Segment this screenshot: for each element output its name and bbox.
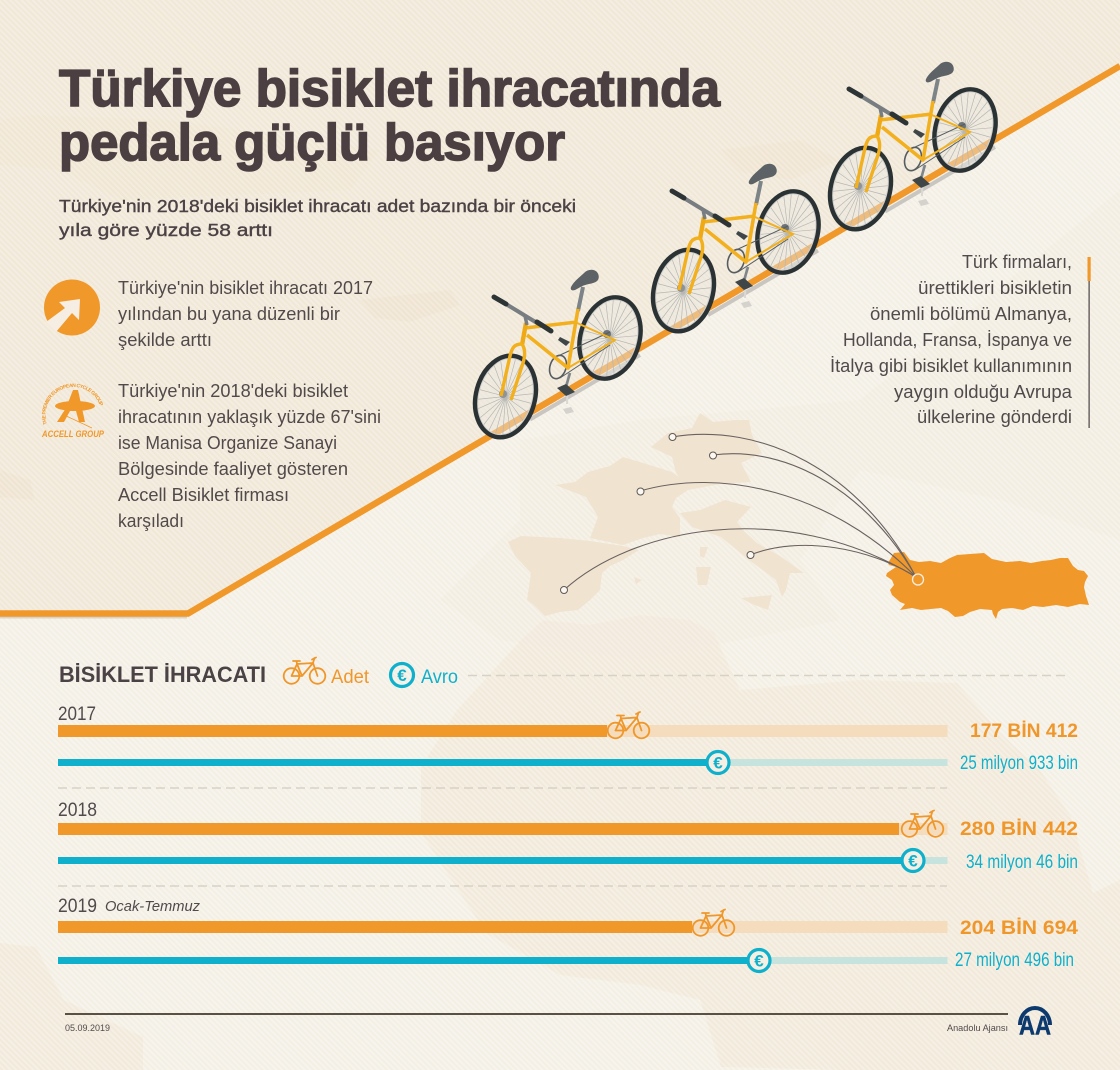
map: origin dot on Turkey <box>912 574 924 585</box>
subtitle: yıla göre yüzde 58 arttı <box>59 220 273 240</box>
legend: euro: € <box>397 666 407 685</box>
map: export arcs from Turkey <box>564 434 916 590</box>
map: Turkey <box>886 552 1089 619</box>
row: 2019: € <box>754 952 764 970</box>
row: 2017: 25 milyon 933 bin <box>960 753 1078 774</box>
text block: destination countries: yaygın olduğu Avrupa <box>894 382 1073 402</box>
footer date: 05.09.2019 <box>65 1023 110 1033</box>
row: 2018: € <box>908 852 918 870</box>
text block: export growth: şekilde arttı <box>118 330 212 350</box>
text block: destination countries <box>830 252 1073 427</box>
title: pedala güçlü basıyor <box>59 114 565 172</box>
legend: euro: Avro <box>421 667 458 688</box>
row: 2019: 204 BİN 694 <box>960 918 1078 939</box>
text block: Accell share: ihracatının yaklaşık yüzde 67'sini <box>118 407 381 427</box>
footer rule <box>65 1013 1008 1015</box>
footer source: Anadolu Ajansı <box>947 1023 1008 1034</box>
subtitle <box>59 196 576 240</box>
text block: destination countries: önemli bölümü Almanya, <box>870 304 1072 324</box>
row: 2018: 34 milyon 46 bin <box>966 852 1078 873</box>
bicycle 2 <box>644 164 828 339</box>
row: 2019: 2019 <box>58 896 97 917</box>
text block: export growth: yılından bu yana düzenli bir <box>118 304 340 324</box>
callout rule <box>1088 257 1091 428</box>
text block: Accell share <box>118 381 381 531</box>
text block: Accell share: Türkiye'nin 2018'deki bisiklet <box>118 381 348 401</box>
row: 2017: € <box>713 754 723 772</box>
bicycle 1 <box>466 270 650 445</box>
text block: destination countries: İtalya gibi bisiklet kullanımının <box>830 356 1072 376</box>
row: 2018: 280 BİN 442 <box>960 819 1078 840</box>
subtitle: Türkiye'nin 2018'deki bisiklet ihracatı adet bazında bir önceki <box>59 196 576 216</box>
text block: destination countries: Türk firmaları, <box>962 252 1072 272</box>
icon: Accell Group logo: ACCELL GROUP <box>41 429 105 440</box>
text block: Accell share: Accell Bisiklet firması <box>118 485 289 505</box>
map: Europe countries <box>508 413 804 616</box>
text block: destination countries: ülkelerine gönderdi <box>917 407 1072 427</box>
icon: upward arrow <box>44 280 100 336</box>
text block: Accell share: Bölgesinde faaliyet gösteren <box>118 459 348 479</box>
text block: destination countries: Hollanda, Fransa, İspanya ve <box>843 330 1072 350</box>
bicycle 3 <box>821 62 1005 237</box>
dashed dividers <box>58 676 1066 886</box>
row: 2017: 177 BİN 412 <box>970 721 1078 742</box>
title <box>59 60 721 172</box>
logo: Anadolu Agency: AA <box>1019 1010 1051 1040</box>
row: 2019: 27 milyon 496 bin <box>955 950 1074 971</box>
text block: Accell share: ise Manisa Organize Sanayi <box>118 433 337 453</box>
legend: bike units: Adet <box>331 667 370 688</box>
row: 2018 <box>58 800 1078 873</box>
legend: bike units <box>284 658 370 688</box>
text block: export growth: Türkiye'nin bisiklet ihracatı 2017 <box>118 278 373 298</box>
text block: destination countries: ürettikleri bisikletin <box>918 278 1072 298</box>
row: 2017: 2017 <box>58 704 96 725</box>
row: 2019 <box>58 896 1078 972</box>
map: destination dots <box>560 434 754 594</box>
text block: Accell share: karşıladı <box>118 511 184 531</box>
text block: export growth <box>118 278 373 350</box>
row: 2018: 2018 <box>58 800 97 821</box>
row: 2019: Ocak-Temmuz <box>105 898 200 915</box>
legend: euro <box>390 664 458 688</box>
section heading: BİSİKLET İHRACATI <box>59 662 266 687</box>
title: Türkiye bisiklet ihracatında <box>59 60 721 118</box>
diagonal road shadow <box>0 147 995 618</box>
row: 2017 <box>58 704 1078 774</box>
diagonal orange road <box>0 66 1120 614</box>
icon: Accell Group logo: THE PREMIER EUROPEAN CYCLE GROUP <box>42 384 103 425</box>
